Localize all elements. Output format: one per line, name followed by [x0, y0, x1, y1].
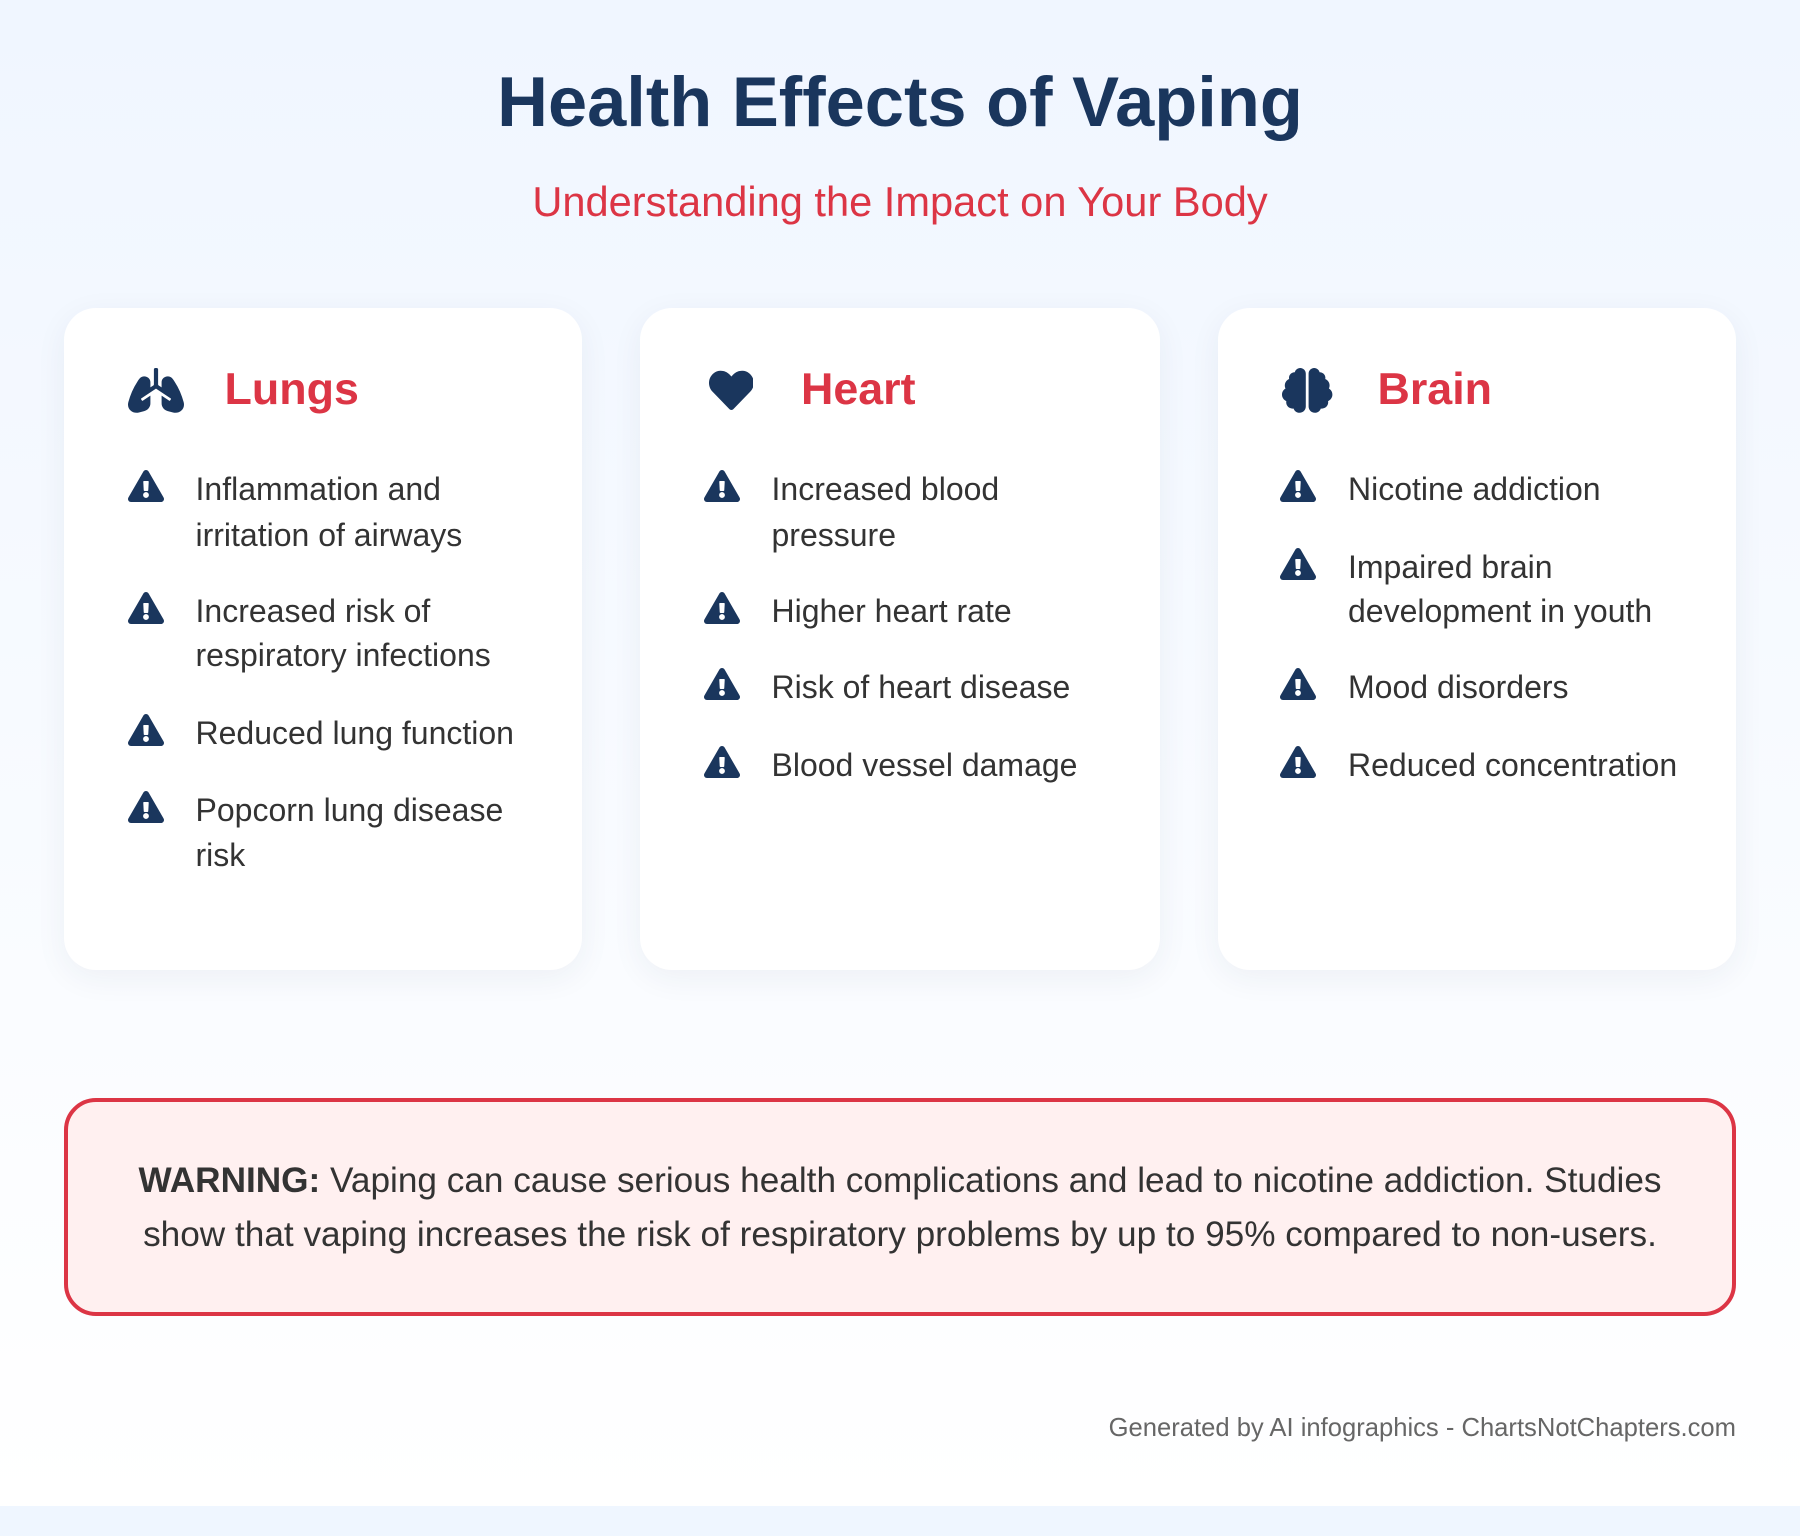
list item: Blood vessel damage	[772, 747, 1077, 783]
list item: Popcorn lung disease	[196, 792, 503, 828]
list item: irritation of airways	[196, 517, 462, 553]
icon: heart	[709, 370, 753, 410]
list item: Risk of heart disease	[772, 669, 1070, 705]
list item: Increased blood	[772, 471, 999, 507]
callout: warning: WARNING: Vaping can cause serious health complications and lead to nicotine addiction. Studies show that vaping increases the risk of respiratory problems by up to 95% compared to non-users.	[138, 1161, 1662, 1254]
list item: Reduced lung function	[196, 715, 514, 751]
panel: brain	[1218, 308, 1736, 970]
icon: brain	[1282, 368, 1332, 413]
footer credit: Generated by AI infographics - ChartsNotChapters.com	[1109, 1414, 1736, 1442]
panel: heart	[640, 308, 1160, 970]
list item: Inflammation and	[196, 471, 441, 507]
title: Health Effects of Vaping	[497, 62, 1303, 141]
list item: respiratory infections	[196, 637, 491, 673]
heading: heart: Heart	[801, 364, 916, 414]
list item: development in youth	[1348, 593, 1652, 629]
callout: warning	[64, 1098, 1736, 1316]
list item: Higher heart rate	[772, 593, 1012, 629]
list item	[128, 592, 491, 673]
subtitle: Understanding the Impact on Your Body	[532, 178, 1268, 225]
heading: lungs: Lungs	[224, 364, 359, 414]
list item: Reduced concentration	[1348, 747, 1677, 783]
heading: brain: Brain	[1378, 364, 1492, 414]
list item: Impaired brain	[1348, 549, 1553, 585]
list: lung effects	[128, 470, 514, 873]
icon: lungs	[128, 368, 184, 413]
list item: pressure	[772, 517, 896, 553]
list item: risk	[196, 837, 245, 873]
list item	[704, 470, 999, 553]
list item	[128, 791, 503, 873]
list: brain effects	[1280, 470, 1677, 783]
list item: Increased risk of	[196, 593, 430, 629]
list item	[128, 470, 462, 553]
list: heart effects	[704, 470, 1077, 783]
list item: Nicotine addiction	[1348, 471, 1601, 507]
list item	[1280, 548, 1652, 629]
panel: lungs	[64, 308, 582, 970]
list item: Mood disorders	[1348, 669, 1569, 705]
